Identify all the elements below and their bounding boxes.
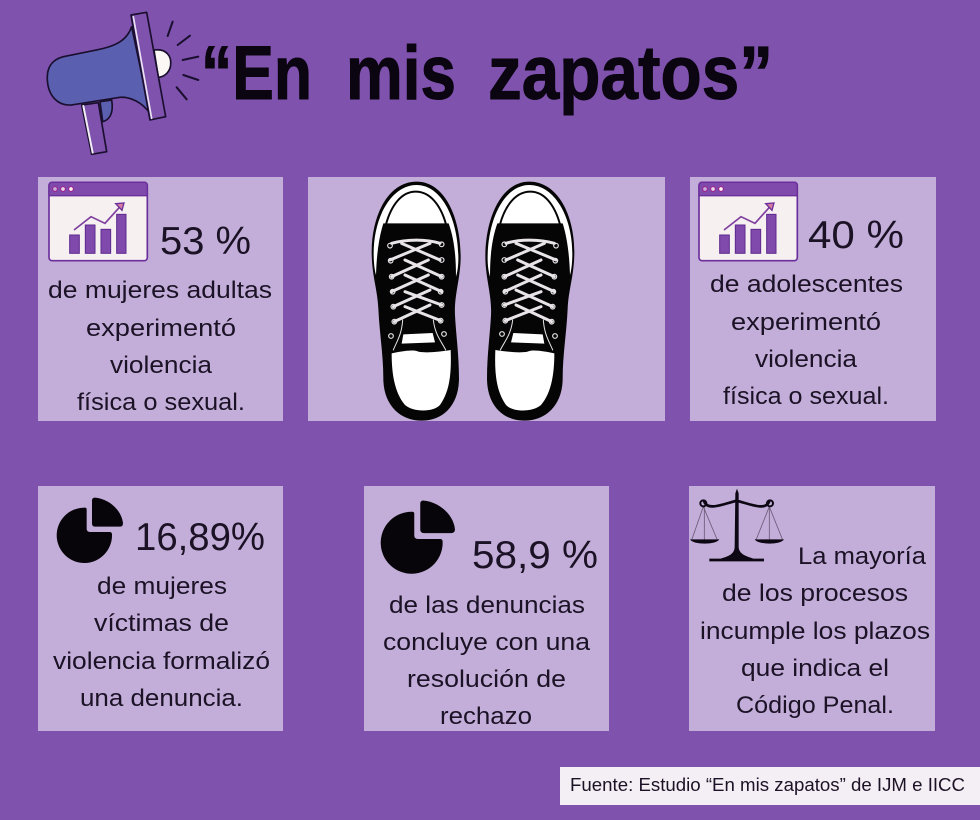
icon: growth chart window <box>699 182 797 261</box>
panel: shoes <box>308 177 665 421</box>
text: complaints description: violencia formalizó <box>53 648 270 675</box>
text: rejection description: concluye con una <box>383 629 591 656</box>
stat: 53 %: 53 % <box>160 220 251 263</box>
icon: left shoe <box>372 182 461 421</box>
text: deadlines description: que indica el <box>741 655 889 682</box>
text: adolescents description: violencia <box>755 346 858 373</box>
panel: 16,89% complaints <box>38 486 283 731</box>
title: zapatos” <box>488 31 773 116</box>
icon: right shoe <box>485 182 574 421</box>
icon: pie chart <box>381 501 455 574</box>
panel: 53 % adult women <box>38 177 283 421</box>
stat: 58,9 %: 58,9 % <box>472 534 598 577</box>
text: complaints description <box>53 573 270 712</box>
title: mis <box>346 31 456 116</box>
text: complaints description: una denuncia. <box>80 685 243 712</box>
text: rejection description: de las denuncias <box>389 592 585 619</box>
title: “En <box>201 31 312 116</box>
stat: 16,89%: 16,89% <box>135 516 265 559</box>
text: deadlines description: de los procesos <box>722 580 908 607</box>
text: adolescents description: de adolescentes <box>710 271 903 298</box>
text: adult women description: física o sexual. <box>77 389 245 416</box>
text: rejection description <box>383 592 591 730</box>
source note <box>560 767 980 805</box>
text: deadlines description <box>700 543 930 719</box>
icon: growth chart window <box>49 182 147 261</box>
text: deadlines description: Código Penal. <box>736 692 894 719</box>
text: complaints description: víctimas de <box>94 610 229 637</box>
icon: megaphone <box>47 12 198 154</box>
panel: 58,9 % rejection <box>364 486 609 731</box>
title <box>201 31 773 116</box>
text: deadlines description: incumple los plazos <box>700 618 930 645</box>
stat: 40 %: 40 % <box>808 214 904 257</box>
text: complaints description: de mujeres <box>97 573 227 600</box>
panel: 40 % adolescents <box>690 177 936 421</box>
text: deadlines description: La mayoría <box>798 543 927 570</box>
text: adult women description: experimentó <box>86 315 236 342</box>
source note: Fuente: Estudio “En mis zapatos” de IJM e IICC <box>570 775 965 795</box>
text: adult women description <box>48 277 272 416</box>
text: adolescents description <box>710 271 903 410</box>
text: rejection description: rechazo <box>440 703 532 730</box>
text: rejection description: resolución de <box>407 666 566 693</box>
text: adolescents description: experimentó <box>731 309 881 336</box>
text: adult women description: violencia <box>110 352 213 379</box>
text: adult women description: de mujeres adultas <box>48 277 272 304</box>
text: adolescents description: física o sexual. <box>723 383 889 410</box>
icon: scales of justice <box>690 489 784 561</box>
panel: legal deadlines <box>689 486 935 731</box>
icon: pie chart <box>57 498 123 563</box>
